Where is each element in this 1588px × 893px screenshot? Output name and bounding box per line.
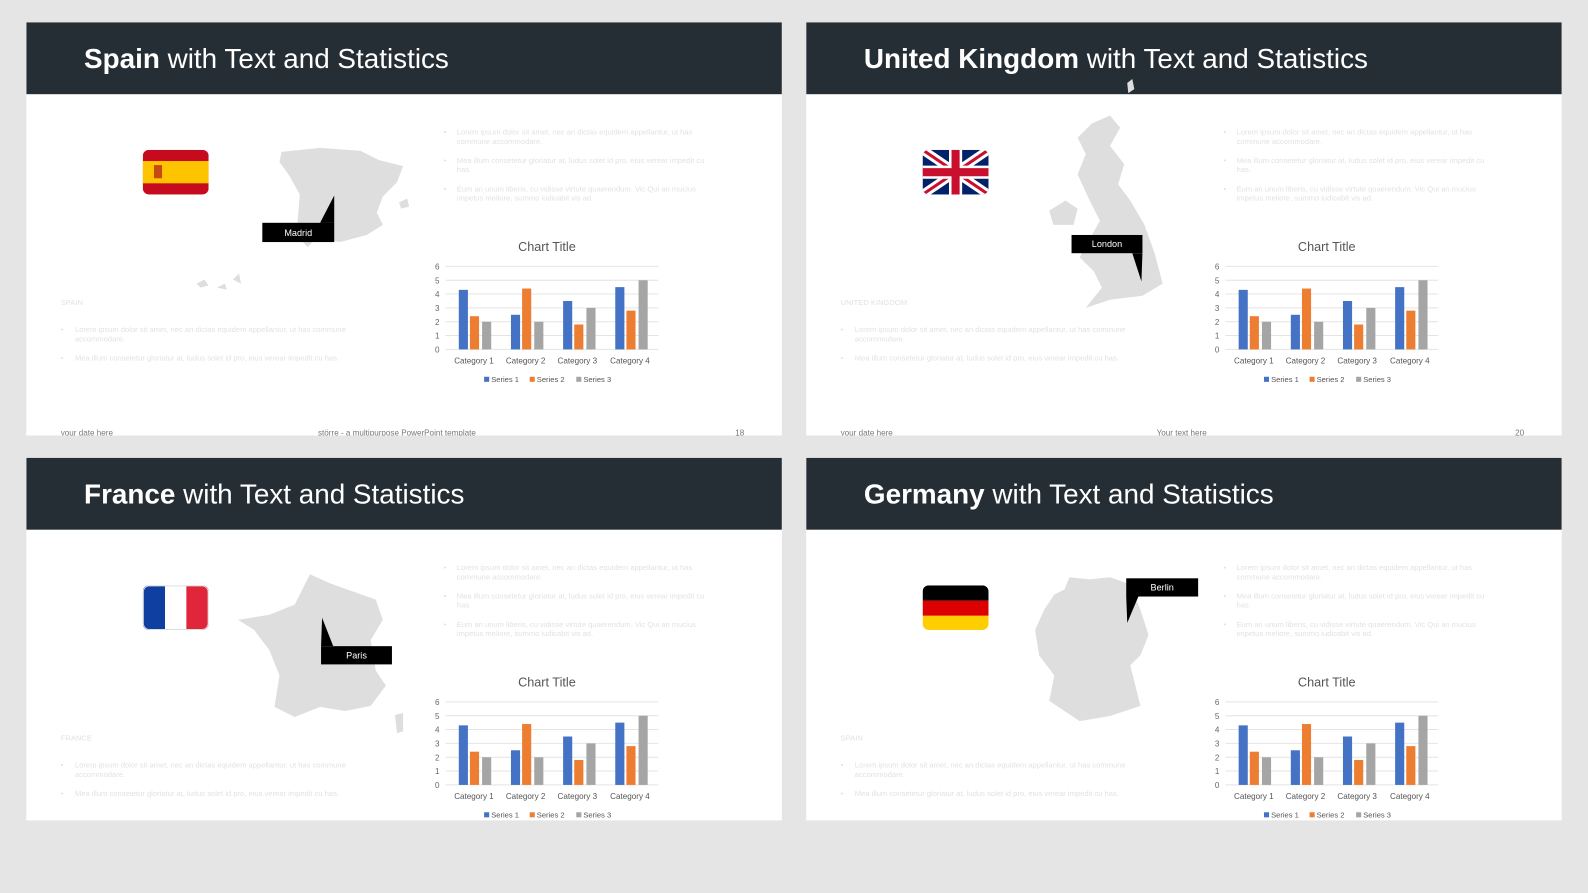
- text block: left: •: [61, 761, 64, 770]
- text block: left: [61, 733, 346, 798]
- text block: left: Lorem ipsum dolor sit amet, nec an dictas equidem appellantur, ut has commune: [855, 761, 1126, 770]
- callout: Madrid: [262, 195, 334, 242]
- bar chart: Category 3: [557, 357, 598, 366]
- text block: right bullets: commune accommodare.: [457, 572, 542, 581]
- text block: right bullets: •: [1223, 592, 1226, 601]
- text block: left: Mea illum consetetur gloriatur at, ludus solet id pro, eius verear impedit cu has.: [855, 789, 1119, 798]
- bar chart: [1215, 676, 1438, 819]
- text block: right bullets: •: [444, 156, 447, 165]
- bar chart: Category 2: [506, 357, 546, 366]
- text block: right bullets: [1223, 563, 1484, 638]
- text block: right bullets: Mea illum consetetur gloriatur at, ludus solet id pro, eius verear impedit cu: [457, 592, 704, 601]
- bar chart: Chart Title: [1298, 240, 1356, 254]
- bar chart: Category 3: [1337, 357, 1377, 366]
- bar chart: Category 3: [1337, 792, 1377, 801]
- text block: right bullets: Eum an unum liberis, cu vidisse virtute quaerendum. Vic Qui an mucius: [1237, 184, 1476, 193]
- title: United Kingdom: United Kingdom with Text and Statistics: [864, 43, 1368, 74]
- text block: right bullets: Eum an unum liberis, cu vidisse virtute quaerendum. Vic Qui an mucius: [1237, 620, 1476, 629]
- bar chart: Category 2: [506, 792, 546, 801]
- text block: right bullets: Lorem ipsum dolor sit amet, nec an dictas equidem appellantur, ut has: [1237, 128, 1472, 137]
- text block: right bullets: has.: [457, 165, 471, 174]
- text block: left: [841, 733, 1126, 798]
- bar chart: Series 3: [583, 375, 611, 384]
- title: United Kingdom: [806, 22, 1562, 94]
- panel: United Kingdom: [806, 22, 1562, 436]
- bar chart: Category 4: [1390, 792, 1430, 801]
- bar chart: [1215, 240, 1438, 384]
- bar chart: [435, 676, 658, 819]
- text block: right bullets: •: [1223, 156, 1226, 165]
- bar chart: Series 1: [491, 375, 519, 384]
- bar chart: 1: [1215, 331, 1220, 340]
- bar chart: Series 1: [491, 810, 519, 819]
- bar chart: 5: [435, 277, 440, 286]
- bar chart: Category 3: [557, 792, 598, 801]
- panel: Spain: [26, 22, 782, 436]
- bar chart: 2: [435, 318, 440, 327]
- text block: right bullets: •: [1223, 563, 1226, 572]
- icon: Spain flag: [143, 150, 209, 194]
- text block: left: •: [61, 789, 64, 798]
- footer: [841, 429, 1525, 438]
- bar chart: 4: [435, 290, 440, 299]
- title: Spain: [26, 22, 782, 94]
- bar chart: Category 4: [610, 357, 650, 366]
- text block: left: SPAIN: [841, 733, 863, 742]
- text block: left: FRANCE: [61, 733, 92, 742]
- bar chart: 3: [435, 739, 440, 748]
- text block: right bullets: impetus meliore, summo iudicabit vis ad.: [457, 194, 593, 203]
- callout: Paris: Paris: [346, 650, 367, 660]
- text block: right bullets: •: [444, 184, 447, 193]
- text block: left: •: [61, 325, 64, 334]
- text block: right bullets: impetus meliore, summo iudicabit vis ad.: [1237, 629, 1373, 638]
- map: France: [238, 574, 403, 733]
- text block: left: •: [841, 761, 844, 770]
- bar chart: 6: [1215, 698, 1220, 707]
- text block: left: accommodare.: [75, 334, 125, 343]
- callout: Madrid: Madrid: [284, 228, 312, 238]
- bar chart: 0: [1215, 781, 1220, 790]
- text block: right bullets: Mea illum consetetur gloriatur at, ludus solet id pro, eius verear impedit cu: [1237, 156, 1484, 165]
- text block: left: accommodare.: [855, 770, 905, 779]
- text block: left: UNITED KINGDOM: [841, 298, 907, 307]
- text block: left: [61, 298, 346, 363]
- text block: right bullets: Mea illum consetetur gloriatur at, ludus solet id pro, eius verear impedit cu: [1237, 592, 1484, 601]
- icon: Germany flag: [923, 585, 988, 630]
- bar chart: 3: [1215, 739, 1220, 748]
- text block: left: Lorem ipsum dolor sit amet, nec an dictas equidem appellantur, ut has commune: [855, 325, 1126, 334]
- text block: left: •: [841, 354, 844, 363]
- bar chart: Series 2: [537, 810, 565, 819]
- bar chart: 1: [435, 767, 440, 776]
- bar chart: 2: [1215, 318, 1220, 327]
- title: Germany: Germany with Text and Statistics: [864, 478, 1274, 509]
- text block: left: Lorem ipsum dolor sit amet, nec an dictas equidem appellantur, ut has commune: [75, 761, 346, 770]
- bar chart: 3: [435, 304, 440, 313]
- text block: right bullets: impetus meliore, summo iudicabit vis ad.: [457, 629, 593, 638]
- text block: left: accommodare.: [75, 770, 125, 779]
- bar chart: Series 3: [583, 810, 611, 819]
- text block: right bullets: •: [1223, 128, 1226, 137]
- bar chart: Series 3: [1363, 810, 1391, 819]
- text block: right bullets: Lorem ipsum dolor sit amet, nec an dictas equidem appellantur, ut has: [457, 128, 692, 137]
- bar chart: 2: [1215, 754, 1220, 763]
- text block: right bullets: •: [444, 128, 447, 137]
- bar chart: 1: [435, 331, 440, 340]
- callout: Paris: [321, 618, 392, 664]
- text block: right bullets: Lorem ipsum dolor sit amet, nec an dictas equidem appellantur, ut has: [1237, 563, 1472, 572]
- text block: right bullets: •: [444, 620, 447, 629]
- bar chart: 6: [1215, 262, 1220, 271]
- text block: right bullets: •: [1223, 184, 1226, 193]
- bar chart: Category 2: [1286, 357, 1326, 366]
- bar chart: 6: [435, 262, 440, 271]
- text block: left: accommodare.: [855, 334, 905, 343]
- text block: left: [841, 298, 1126, 363]
- bar chart: Series 2: [537, 375, 565, 384]
- icon: UK flag: [923, 150, 988, 194]
- bar chart: 4: [1215, 725, 1220, 734]
- bar chart: [435, 240, 658, 384]
- text block: right bullets: has.: [1237, 165, 1251, 174]
- bar chart: Category 4: [1390, 357, 1430, 366]
- title: Germany: [806, 458, 1562, 530]
- bar chart: 1: [1215, 767, 1220, 776]
- text block: right bullets: •: [1223, 620, 1226, 629]
- bar chart: Category 2: [1286, 792, 1326, 801]
- bar chart: 4: [1215, 290, 1220, 299]
- icon: France flag: [143, 585, 209, 630]
- text block: right bullets: impetus meliore, summo iudicabit vis ad.: [1237, 194, 1373, 203]
- bar chart: Category 1: [1234, 357, 1274, 366]
- bar chart: 0: [435, 781, 440, 790]
- title: France: [26, 458, 782, 530]
- text block: right bullets: [444, 128, 704, 203]
- bar chart: Category 4: [610, 792, 650, 801]
- title: Spain: Spain with Text and Statistics: [84, 43, 449, 74]
- text block: right bullets: Eum an unum liberis, cu vidisse virtute quaerendum. Vic Qui an mucius: [457, 184, 696, 193]
- bar chart: Chart Title: [518, 240, 576, 254]
- bar chart: 6: [435, 698, 440, 707]
- bar chart: 2: [435, 754, 440, 763]
- bar chart: Series 2: [1317, 375, 1344, 384]
- text block: right bullets: •: [444, 563, 447, 572]
- text block: right bullets: commune accommodare.: [1237, 137, 1322, 146]
- text block: right bullets: Lorem ipsum dolor sit amet, nec an dictas equidem appellantur, ut has: [457, 563, 692, 572]
- callout: London: London: [1092, 239, 1122, 249]
- text block: left: Mea illum consetetur gloriatur at, ludus solet id pro, eius verear impedit cu has.: [75, 354, 339, 363]
- text block: right bullets: has.: [457, 601, 471, 610]
- callout: Berlin: [1126, 578, 1198, 623]
- bar chart: 5: [435, 712, 440, 721]
- text block: left: Lorem ipsum dolor sit amet, nec an dictas equidem appellantur, ut has commune: [75, 325, 346, 334]
- bar chart: Category 1: [1234, 792, 1274, 801]
- text block: left: •: [61, 354, 64, 363]
- text block: right bullets: [1223, 128, 1484, 203]
- bar chart: Series 1: [1271, 375, 1299, 384]
- text block: right bullets: [444, 563, 704, 638]
- map: Spain: [196, 148, 409, 290]
- bar chart: 4: [435, 725, 440, 734]
- bar chart: 5: [1215, 277, 1220, 286]
- text block: left: Mea illum consetetur gloriatur at, ludus solet id pro, eius verear impedit cu has.: [75, 789, 339, 798]
- panel: France: [26, 458, 782, 820]
- callout: Berlin: Berlin: [1151, 582, 1174, 592]
- bar chart: Series 2: [1317, 810, 1344, 819]
- bar chart: 0: [435, 345, 440, 354]
- callout: London: [1072, 235, 1142, 282]
- map: Germany: [1035, 577, 1149, 721]
- text block: right bullets: commune accommodare.: [457, 137, 542, 146]
- text block: right bullets: has.: [1237, 601, 1251, 610]
- text block: right bullets: commune accommodare.: [1237, 572, 1322, 581]
- title: France: France with Text and Statistics: [84, 478, 464, 509]
- text block: right bullets: Mea illum consetetur gloriatur at, ludus solet id pro, eius verear impedit cu: [457, 156, 704, 165]
- text block: left: •: [841, 325, 844, 334]
- bar chart: 3: [1215, 304, 1220, 313]
- text block: right bullets: Eum an unum liberis, cu vidisse virtute quaerendum. Vic Qui an mucius: [457, 620, 696, 629]
- bar chart: Series 3: [1363, 375, 1391, 384]
- bar chart: Series 1: [1271, 810, 1299, 819]
- bar chart: Chart Title: [518, 676, 576, 690]
- bar chart: Chart Title: [1298, 676, 1356, 690]
- footer: [61, 429, 745, 438]
- panel: Germany: [806, 458, 1562, 820]
- text block: left: •: [841, 789, 844, 798]
- bar chart: Category 1: [454, 792, 494, 801]
- text block: left: Mea illum consetetur gloriatur at, ludus solet id pro, eius verear impedit cu has.: [855, 354, 1119, 363]
- map: United Kingdom: [1049, 79, 1163, 308]
- bar chart: 5: [1215, 712, 1220, 721]
- text block: left: SPAIN: [61, 298, 83, 307]
- text block: right bullets: •: [444, 592, 447, 601]
- bar chart: Category 1: [454, 357, 494, 366]
- bar chart: 0: [1215, 345, 1220, 354]
